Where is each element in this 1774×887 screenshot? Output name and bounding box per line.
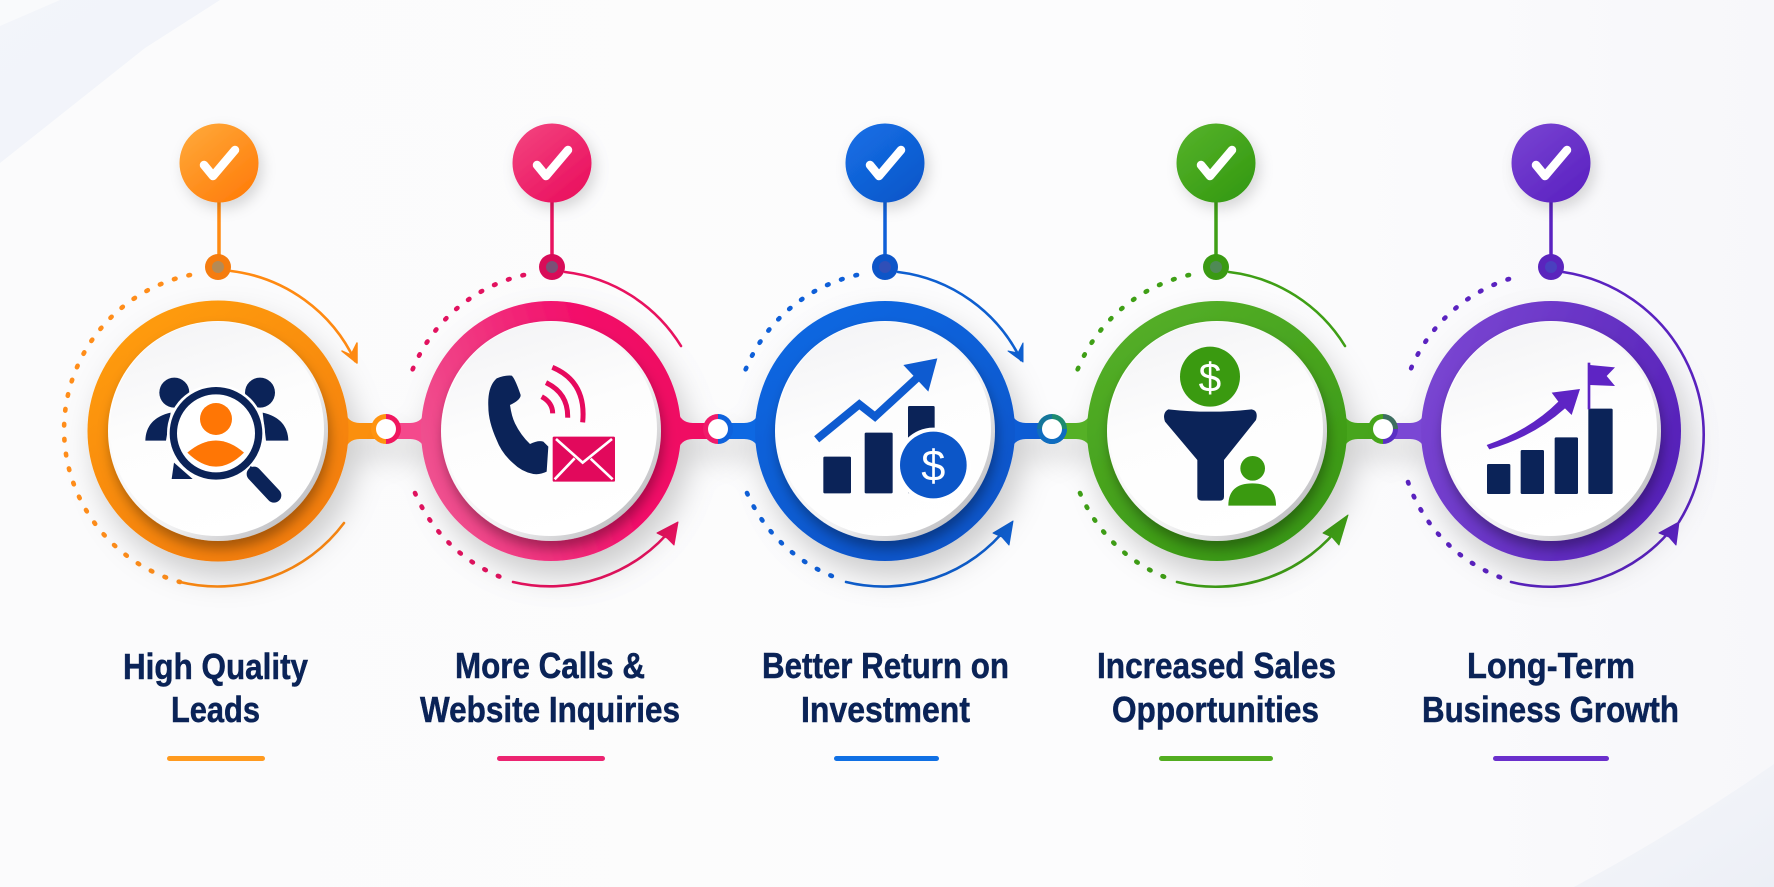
- underline: [1159, 756, 1273, 761]
- label: Increased Sales: [1097, 645, 1336, 686]
- label: Long-Term: [1467, 645, 1635, 686]
- label: Investment: [801, 689, 970, 730]
- check badge: [846, 124, 924, 255]
- connector: blue to green: [1037, 414, 1067, 444]
- orbit arcs and arrows: [1077, 272, 1348, 587]
- label: High Quality: [123, 646, 308, 687]
- icon: funnel with coin and person: [1164, 347, 1276, 506]
- label: [123, 646, 308, 730]
- timeline node: [205, 254, 231, 280]
- icon: chart with rising arrow and coin: $: [921, 443, 945, 491]
- underline: [497, 756, 605, 761]
- underline: [834, 756, 939, 761]
- label: [420, 645, 680, 730]
- connector: pink to blue: [703, 414, 733, 444]
- underline: [1493, 756, 1609, 761]
- icon: chart with rising arrow and coin: [817, 358, 971, 502]
- panel: step 2 more calls and website inquiries: [386, 124, 718, 761]
- timeline node: [872, 254, 898, 280]
- orbit arcs and arrows: [745, 272, 1023, 587]
- icon: growth bars with arrow and flag: [1487, 363, 1615, 494]
- label: [762, 645, 1009, 730]
- icon: phone and envelope: [488, 367, 615, 482]
- panel: step 4 increased sales opportunities: [1052, 124, 1383, 761]
- underline: [167, 756, 265, 761]
- timeline node: [1203, 254, 1229, 280]
- orbit arcs and arrows: [64, 271, 357, 586]
- connector: green to purple: [1368, 414, 1398, 444]
- label: Better Return on: [762, 645, 1009, 686]
- ring: [1052, 301, 1383, 561]
- icon: magnifier over people: [145, 378, 288, 495]
- label: More Calls &: [455, 645, 645, 686]
- connector: orange to pink: [371, 414, 401, 444]
- orbit arcs and arrows: [412, 272, 681, 586]
- panel: step 5 long-term business growth: [1383, 124, 1704, 761]
- label: Opportunities: [1112, 689, 1319, 730]
- check badge: [180, 124, 258, 255]
- timeline node: [1538, 254, 1564, 280]
- timeline node: [539, 254, 565, 280]
- ring: [88, 300, 386, 562]
- panel: step 1 high quality leads: [64, 124, 386, 761]
- ring: [386, 301, 718, 561]
- ring: [718, 301, 1052, 561]
- label: Leads: [171, 689, 260, 730]
- icon: funnel with coin and person: $: [1199, 354, 1221, 400]
- orbit arcs and arrows: [1408, 272, 1704, 587]
- check badge: [512, 124, 592, 255]
- label: [1422, 645, 1679, 730]
- panel: step 3 better return on investment: [718, 124, 1052, 761]
- label: Business Growth: [1422, 689, 1679, 730]
- ring: [1383, 301, 1681, 561]
- check badge: [1512, 124, 1590, 255]
- check badge: [1176, 124, 1256, 255]
- label: Website Inquiries: [420, 689, 680, 730]
- label: [1097, 645, 1336, 730]
